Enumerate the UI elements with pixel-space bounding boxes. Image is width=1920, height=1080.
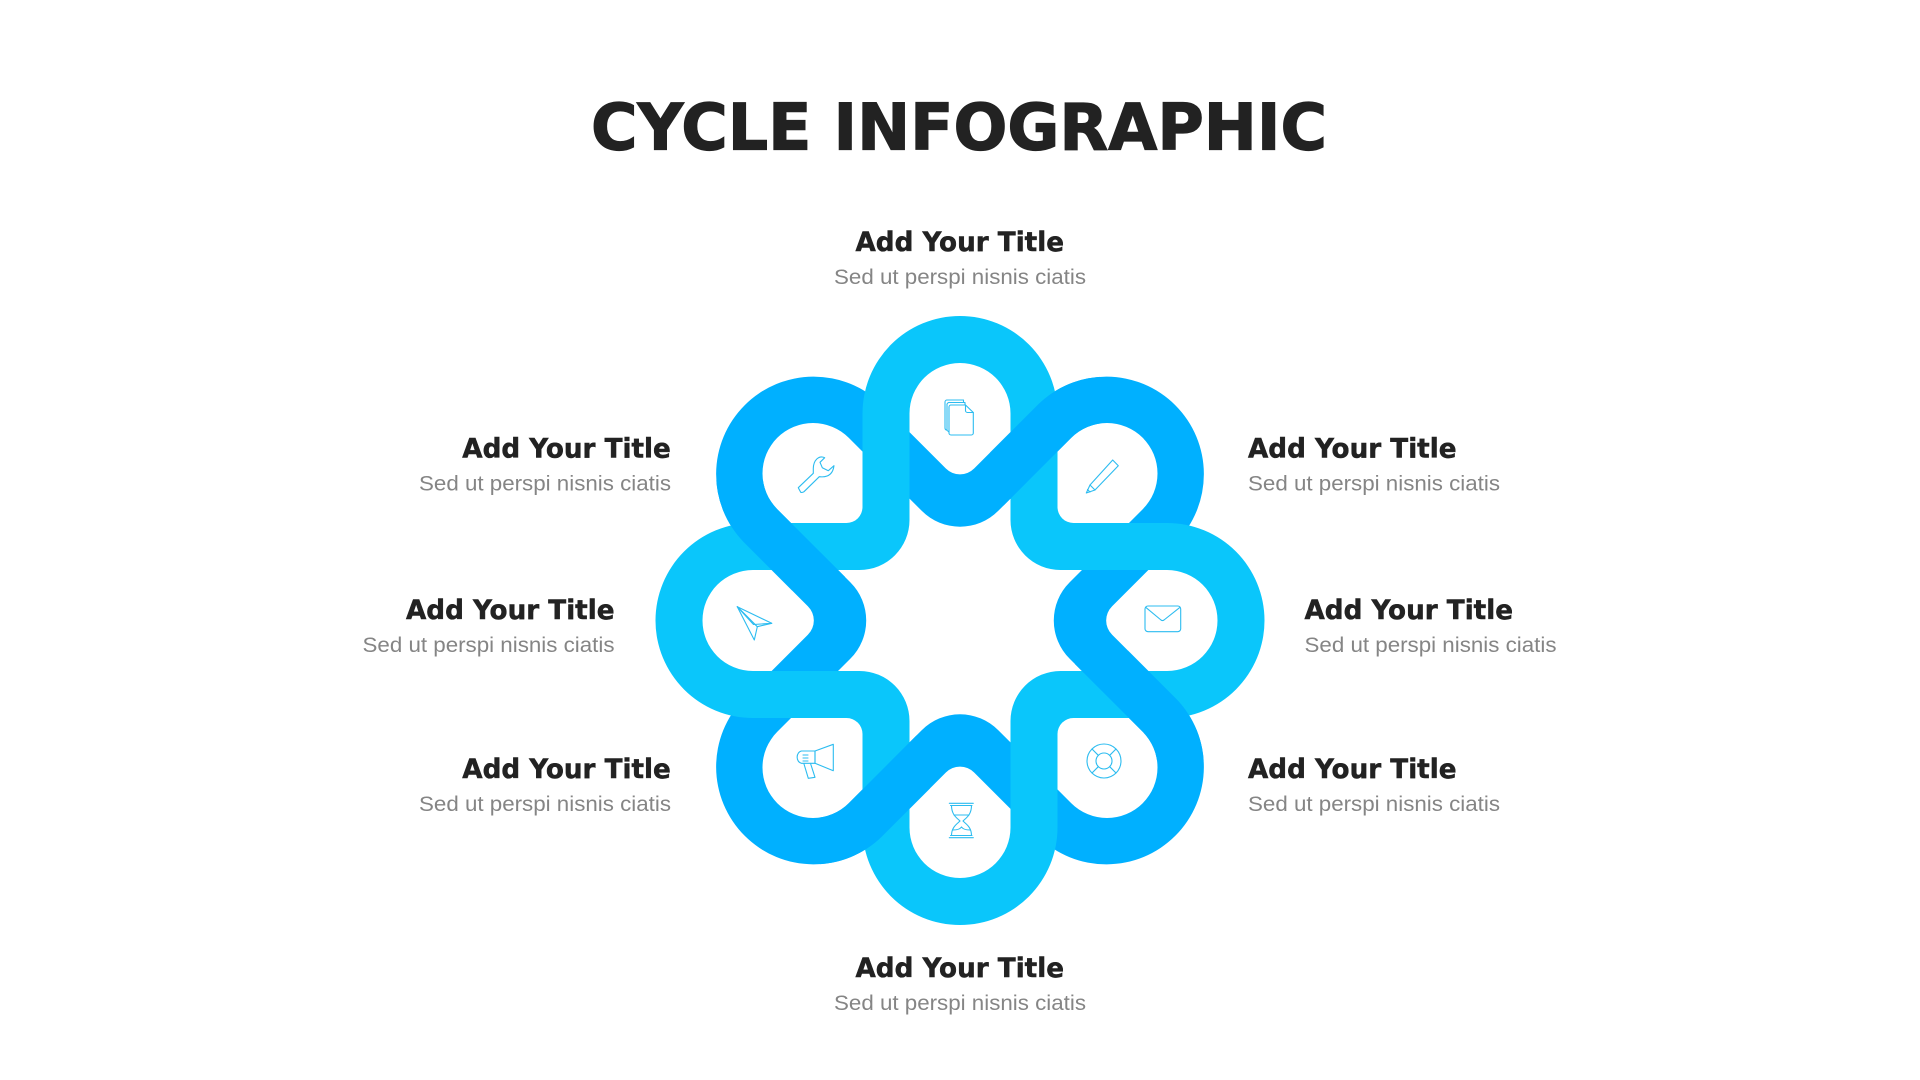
- heading: Add Your Title: [406, 595, 614, 626]
- icon: lifebuoy: [1087, 744, 1121, 778]
- dark blue ribbon, woven crossings on top: [716, 377, 1204, 864]
- heading: Add Your Title: [1248, 433, 1456, 464]
- icon: megaphone: [797, 744, 833, 778]
- light blue ribbon: [656, 316, 1264, 925]
- icon: documents: [945, 400, 973, 435]
- infographic canvas: [364, 101, 1556, 1014]
- heading: Add Your Title: [856, 953, 1064, 984]
- item: upper right: [1248, 433, 1500, 496]
- item: middle left: [362, 595, 614, 657]
- heading: Add Your Title: [1304, 595, 1513, 626]
- item: middle right: [1304, 595, 1556, 657]
- item: top: [834, 227, 1086, 289]
- icon: hourglass: [949, 803, 973, 838]
- item: upper left: [419, 433, 671, 496]
- description: Sed ut perspi nisnis ciatis: [1304, 633, 1556, 657]
- description: Sed ut perspi nisnis ciatis: [1248, 472, 1500, 496]
- icon: pencil: [1086, 460, 1118, 493]
- description: Sed ut perspi nisnis ciatis: [834, 991, 1086, 1015]
- cycle ribbon diagram: [656, 316, 1264, 925]
- heading: Add Your Title: [462, 433, 671, 464]
- icon: wrench: [798, 457, 834, 492]
- item: bottom: [834, 953, 1086, 1015]
- icon: paper plane: [737, 607, 772, 640]
- heading: Add Your Title: [1248, 754, 1456, 785]
- heading: Add Your Title: [856, 227, 1064, 258]
- description: Sed ut perspi nisnis ciatis: [419, 472, 671, 496]
- title: CYCLE INFOGRAPHIC: [591, 90, 1327, 166]
- description: Sed ut perspi nisnis ciatis: [419, 792, 671, 816]
- heading: Add Your Title: [462, 754, 671, 785]
- description: Sed ut perspi nisnis ciatis: [834, 265, 1086, 289]
- dark blue ribbon, lower layer: [716, 377, 1204, 864]
- description: Sed ut perspi nisnis ciatis: [362, 633, 614, 657]
- icon: envelope: [1145, 606, 1181, 632]
- item: lower right: [1248, 754, 1500, 816]
- description: Sed ut perspi nisnis ciatis: [1248, 792, 1500, 816]
- item: lower left: [419, 754, 671, 816]
